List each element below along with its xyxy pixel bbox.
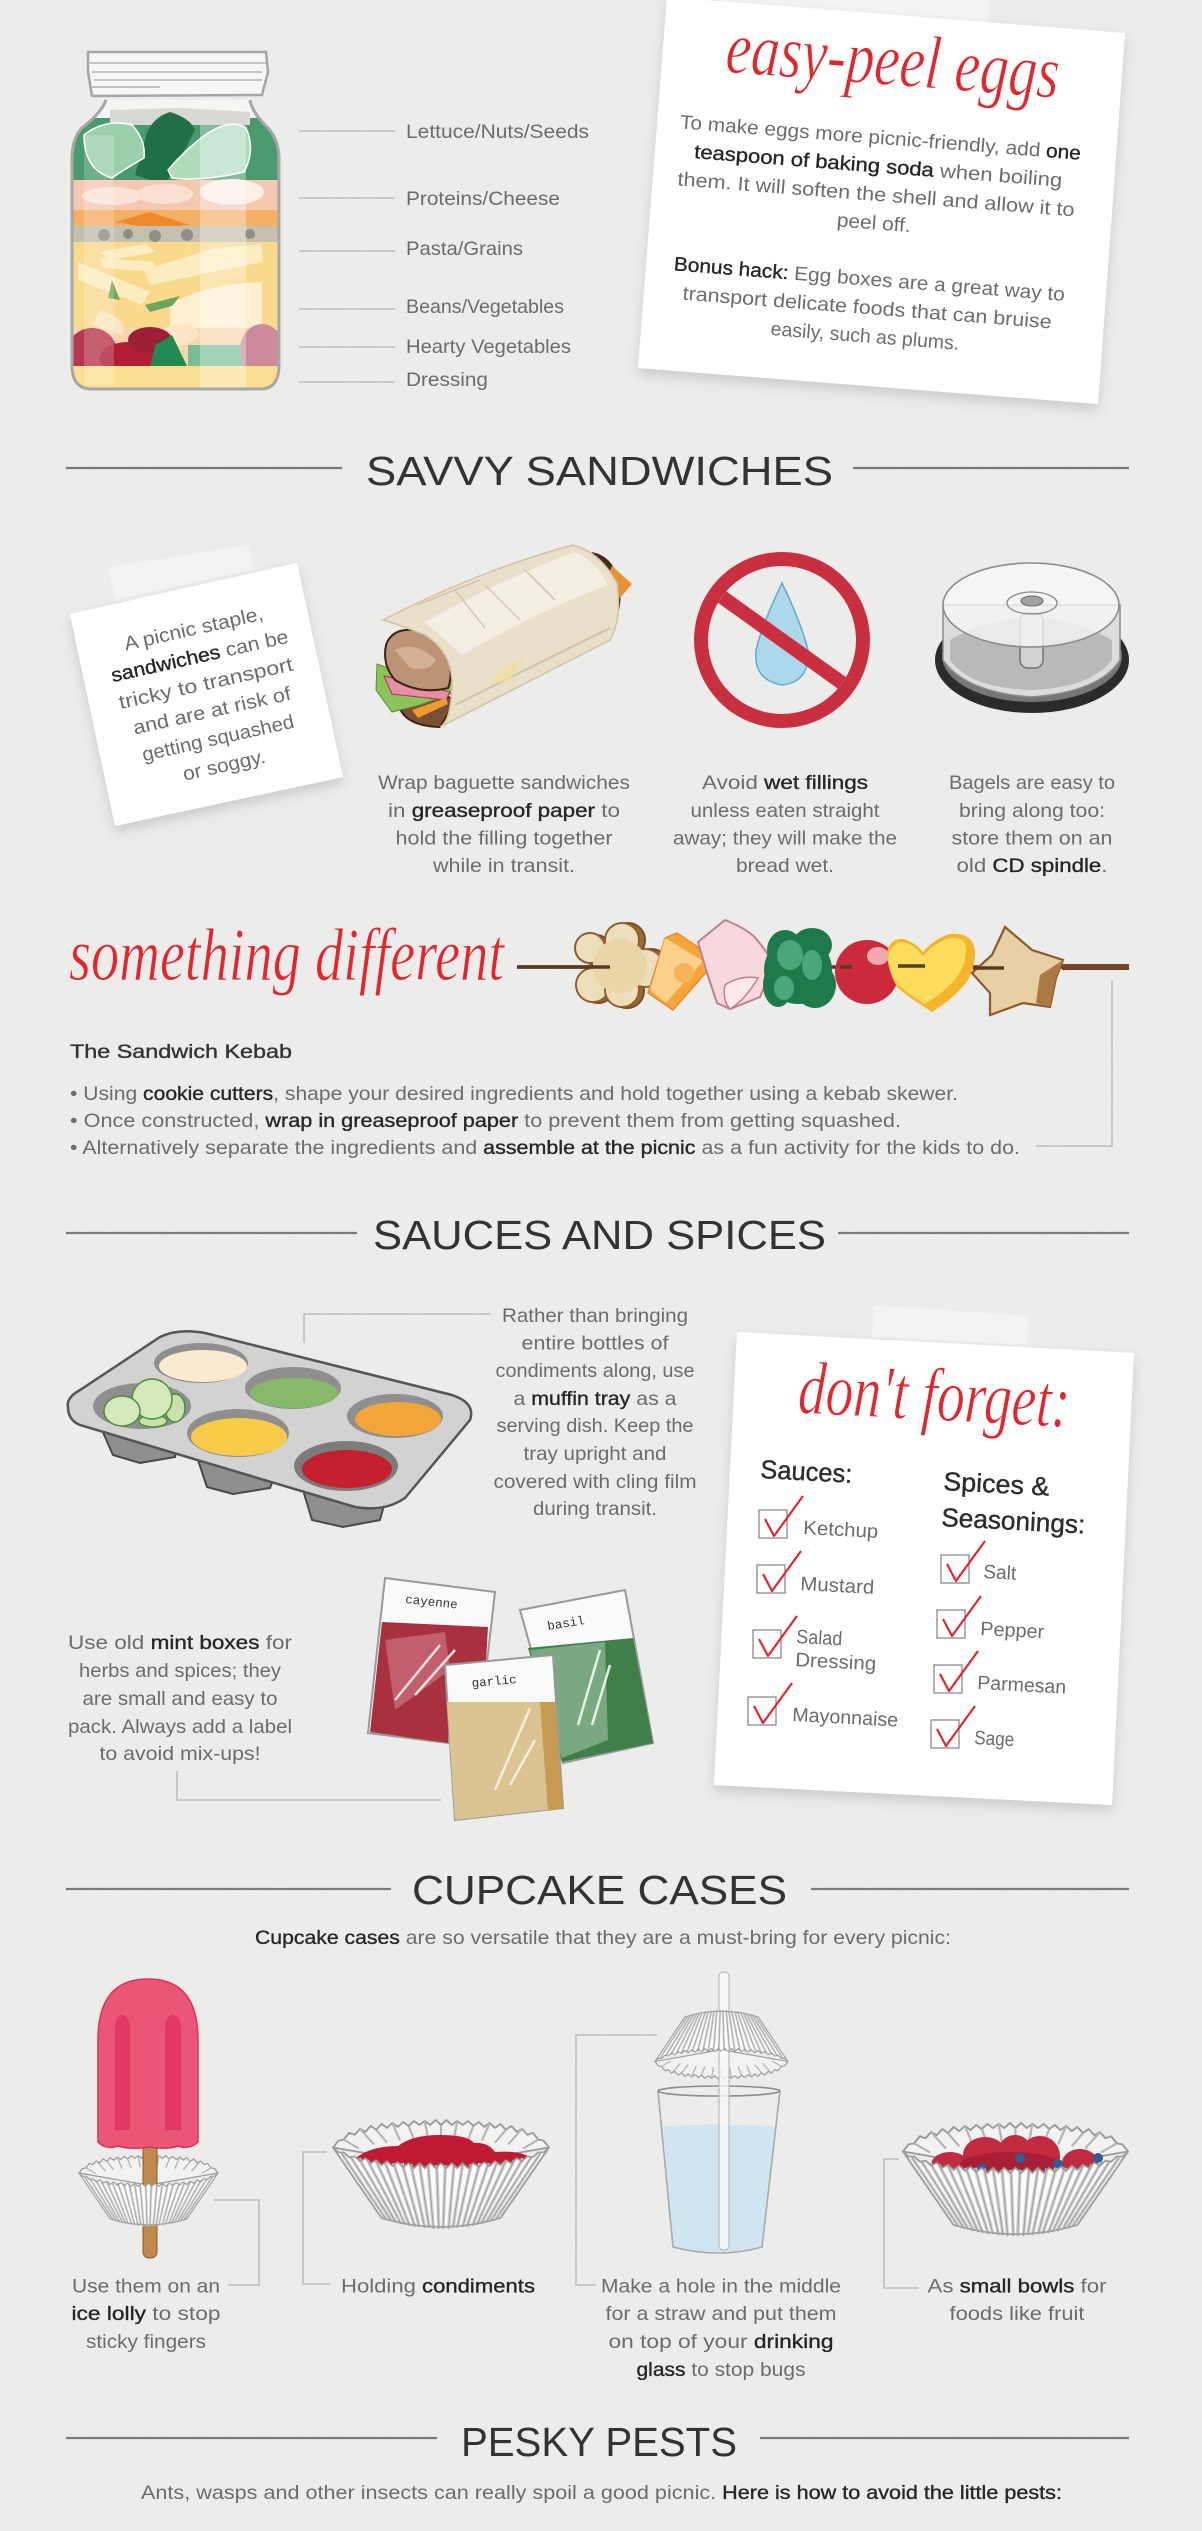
spices column — [931, 1466, 1086, 1751]
caption: small bowls — [884, 2159, 1107, 2325]
caption: avoid wet fillings: Avoid wet fillings — [702, 772, 868, 794]
caption: bagels on CD spindle: bring along too: — [959, 800, 1105, 822]
note text: transport delicate foods that can bruise — [682, 283, 1052, 333]
spices column: Sage — [974, 1727, 1015, 1751]
jar layer labels — [299, 121, 589, 391]
panel: sandwich sticky note: getting squashed — [140, 711, 296, 766]
spices column: Seasonings: — [941, 1502, 1086, 1540]
jar layer labels: Pasta/Grains — [406, 238, 523, 260]
cayenne box — [368, 1578, 495, 1743]
caption: drinking glass: Make a hole in the middle — [601, 2276, 841, 2298]
jar layer labels: Hearty Vegetables — [406, 336, 571, 358]
panel: sandwich sticky note: and are at risk of — [131, 683, 294, 739]
caption: ice lolly: ice lolly to stop — [72, 2303, 221, 2325]
caption: muffin tray: Rather than bringing — [502, 1305, 688, 1327]
kebab text block: • Alternatively separate the ingredients and assemble at the picnic as a fun activity for the kids to do. — [70, 1137, 1020, 1159]
note text: teaspoon of baking soda when boiling — [693, 141, 1063, 192]
sauces column: Mustard — [800, 1573, 875, 1599]
illustration: condiments in case — [333, 2120, 549, 2229]
heading: cupcake cases: CUPCAKE CASES — [412, 1867, 787, 1913]
heart — [887, 934, 975, 1012]
caption: wrap baguette sandwiches: hold the filling together — [396, 828, 613, 850]
caption: bagels on CD spindle: old CD spindle . — [956, 855, 1108, 877]
tomato — [835, 940, 899, 1004]
lettuce — [763, 928, 836, 1008]
panel: sandwich sticky note — [70, 545, 343, 826]
caption: wrap baguette sandwiches: in greaseproof paper to — [388, 800, 620, 822]
caption: avoid wet fillings — [673, 772, 897, 877]
caption: ice lolly: Use them on an — [72, 2276, 220, 2298]
intro: pesky pests: Ants, wasps and other insects can really spoil a good picnic. Here is how to avoid the little pests: — [141, 2482, 1062, 2504]
cayenne box: cayenne — [405, 1593, 458, 1612]
spices column: Spices & — [943, 1466, 1050, 1502]
sauces column: Sauces: — [760, 1454, 853, 1489]
illustration: glass with straw and case — [655, 1972, 788, 2253]
panel: don't forget checklist — [714, 1305, 1134, 1805]
heading: pesky pests: PESKY PESTS — [461, 2419, 737, 2465]
caption: avoid wet fillings: away; they will make the — [673, 828, 897, 850]
heading: sauces and spices: SAUCES AND SPICES — [373, 1212, 826, 1258]
garlic box — [445, 1655, 563, 1820]
panel: sandwich sticky note: sandwiches can be — [109, 626, 291, 687]
caption: condiments — [303, 2152, 535, 2298]
caption: muffin tray: tray upright and — [524, 1443, 666, 1465]
sauces column: Salad — [796, 1626, 843, 1650]
note text: To make eggs more picnic-friendly, add one — [679, 111, 1082, 165]
spices column: Parmesan — [977, 1672, 1067, 1699]
illustration: spice boxes — [368, 1578, 653, 1820]
caption: muffin tray: serving dish. Keep the — [496, 1415, 694, 1437]
icon: no wet fillings sign — [701, 559, 863, 721]
spices column: Salt — [983, 1561, 1017, 1585]
illustration: ice lolly in cupcake case — [79, 1979, 218, 2258]
illustration: mason jar salad — [67, 52, 284, 393]
caption: condiments: Holding condiments — [341, 2276, 535, 2298]
sauces column: Dressing — [795, 1649, 877, 1675]
panel: sandwich sticky note: A picnic staple, — [122, 603, 265, 655]
caption: drinking glass: for a straw and put them — [606, 2303, 836, 2325]
caption: drinking glass: on top of your drinking — [608, 2331, 834, 2353]
kebab text block: • Using cookie cutters , shape your desired ingredients and hold together using a kebab skewer. — [70, 1083, 958, 1105]
caption: mint boxes — [68, 1632, 441, 1800]
jar layer labels: Proteins/Cheese — [406, 188, 560, 210]
illustration: wrapped baguette sandwich — [376, 545, 632, 727]
caption: muffin tray: a muffin tray as a — [514, 1388, 677, 1410]
caption: mint boxes: are small and easy to — [82, 1688, 278, 1710]
caption: wrap baguette sandwiches: while in transit. — [432, 855, 575, 877]
kebab text block — [70, 980, 1112, 1159]
caption: muffin tray: covered with cling film — [494, 1471, 696, 1493]
kebab text block: • Once constructed, wrap in greaseproof paper to prevent them from getting squashed. — [70, 1110, 901, 1132]
note text — [664, 111, 1082, 363]
caption: mint boxes: pack. Always add a label — [68, 1716, 292, 1738]
illustration: muffin tray — [68, 1331, 471, 1527]
jar layer labels: Beans/Vegetables — [406, 296, 564, 318]
caption: mint boxes: herbs and spices; they — [79, 1660, 281, 1682]
caption: bagels on CD spindle: Bagels are easy to — [949, 772, 1115, 794]
sauces column — [748, 1454, 899, 1732]
caption: muffin tray: entire bottles of — [522, 1332, 669, 1354]
note text: Bonus hack: Egg boxes are a great way to — [673, 253, 1066, 306]
basil box — [520, 1590, 653, 1763]
panel: easy-peel eggs note — [638, 0, 1125, 404]
caption: ice lolly: sticky fingers — [86, 2331, 206, 2353]
caption: muffin tray — [304, 1305, 696, 1520]
illustration: fruit in case — [903, 2123, 1128, 2236]
caption: small bowls: foods like fruit — [950, 2303, 1085, 2325]
heading: something different: something different — [69, 913, 506, 997]
ham — [698, 920, 773, 1009]
heading: savvy sandwiches: SAVVY SANDWICHES — [366, 448, 833, 494]
illustration: CD spindle — [935, 563, 1129, 713]
cheese — [648, 933, 717, 1010]
caption: drinking glass: glass to stop bugs — [636, 2359, 806, 2381]
heading: don't forget: don't forget: — [796, 1346, 1072, 1444]
caption: mint boxes: to avoid mix-ups! — [100, 1743, 260, 1765]
bread flower — [517, 923, 670, 1008]
caption: small bowls: As small bowls for — [928, 2276, 1107, 2298]
jar layer labels: Lettuce/Nuts/Seeds — [406, 121, 589, 143]
note text: peel off. — [836, 209, 912, 237]
sauces column: Mayonnaise — [792, 1704, 899, 1732]
note text: them. It will soften the shell and allow it to — [677, 168, 1075, 221]
caption: mint boxes: Use old mint boxes for — [68, 1632, 293, 1654]
caption: bagels on CD spindle: store them on an — [952, 828, 1112, 850]
star — [972, 927, 1063, 1015]
caption: avoid wet fillings: unless eaten straight — [690, 800, 880, 822]
note text: easily, such as plums. — [770, 318, 960, 355]
panel: sandwich sticky note: tricky to transport — [117, 653, 296, 714]
caption: ice lolly — [72, 2200, 259, 2353]
caption: wrap baguette sandwiches: Wrap baguette sandwiches — [378, 772, 630, 794]
basil box: basil — [546, 1614, 586, 1634]
caption: avoid wet fillings: bread wet. — [736, 855, 834, 877]
caption: bagels on CD spindle — [949, 772, 1115, 877]
intro: cupcake cases: Cupcake cases are so versatile that they are a must-bring for every picnic: — [255, 1927, 951, 1949]
panel: sandwich sticky note: or soggy. — [181, 746, 268, 786]
caption: drinking glass — [576, 2035, 841, 2381]
caption: muffin tray: during transit. — [533, 1498, 657, 1520]
illustration: sandwich kebab — [517, 920, 1129, 1015]
garlic box: garlic — [471, 1673, 517, 1691]
kebab text block: The Sandwich Kebab — [70, 1041, 292, 1063]
caption: muffin tray: condiments along, use — [496, 1360, 694, 1382]
heading: easy-peel eggs: easy-peel eggs — [723, 5, 1063, 115]
sauces column: Ketchup — [803, 1517, 879, 1543]
caption: wrap baguette sandwiches — [378, 772, 630, 877]
jar layer labels: Dressing — [406, 369, 488, 391]
spices column: Pepper — [980, 1618, 1045, 1643]
